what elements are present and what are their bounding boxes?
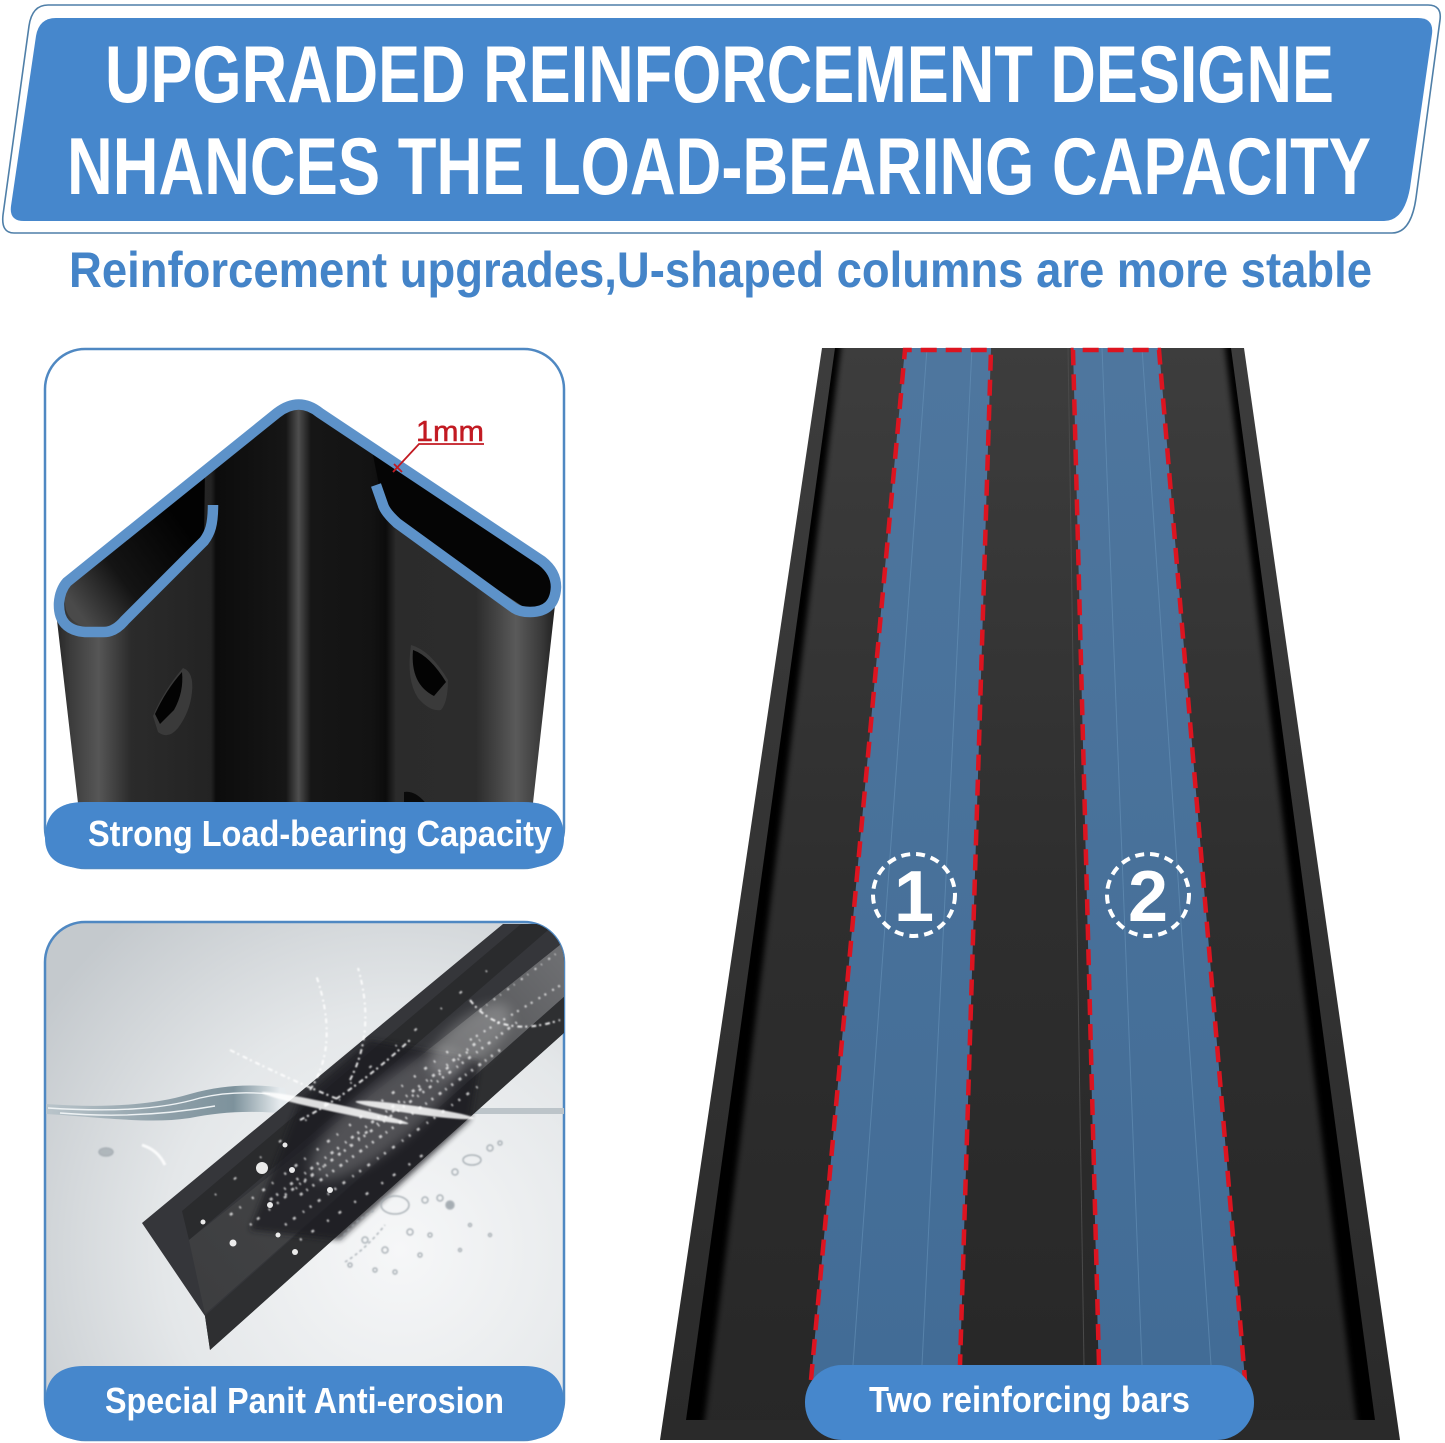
number 1 badge bbox=[873, 854, 955, 937]
rail middle face bbox=[189, 941, 565, 1314]
badge digit: 2 bbox=[1128, 857, 1168, 937]
panel: anti-erosion bbox=[45, 922, 570, 1440]
leader line bbox=[393, 444, 484, 472]
column profile outline bbox=[59, 404, 556, 632]
bar 1 fill bbox=[811, 348, 991, 1380]
dark wet patch bbox=[250, 1040, 480, 1240]
U-shaped column illustration bbox=[55, 404, 557, 812]
panel background bbox=[45, 922, 564, 1440]
bar 2 creases bbox=[1102, 348, 1211, 1365]
caption: special paint anti-erosion bbox=[45, 1366, 564, 1440]
caption pill bbox=[45, 1366, 564, 1440]
hole right opening bbox=[413, 650, 446, 696]
water horizon right bbox=[470, 1108, 570, 1114]
speckled spray bbox=[215, 950, 561, 1240]
panel background bbox=[45, 349, 564, 868]
droplets below surface bbox=[99, 1141, 502, 1274]
panel: load-bearing capacity bbox=[45, 349, 564, 868]
rail in water illustration bbox=[46, 924, 570, 1350]
caption text: Special Panit Anti-erosion bbox=[105, 1380, 504, 1421]
bar 1 red dashed outline bbox=[811, 350, 991, 1380]
bar 1 bbox=[811, 348, 991, 1380]
banner fill bbox=[11, 18, 1432, 221]
rail outer rim bbox=[660, 348, 1400, 1440]
column body bbox=[55, 404, 557, 812]
centre groove bbox=[1068, 348, 1084, 1365]
dimension: 1mm bbox=[393, 416, 484, 472]
bar 2 red dashed outline bbox=[1073, 350, 1245, 1380]
interior shadow right bbox=[1224, 340, 1381, 1425]
hole right bbox=[410, 645, 448, 710]
caption: two reinforcing bars bbox=[805, 1365, 1254, 1440]
caption: strong load-bearing capacity bbox=[45, 802, 564, 868]
hole bottom bbox=[404, 792, 424, 802]
interior shadow left bbox=[680, 340, 842, 1425]
rail channel bbox=[182, 924, 555, 1240]
interior edge shadows bbox=[680, 340, 1381, 1425]
rail base bbox=[142, 924, 565, 1350]
panel: rail with two reinforcing bars bbox=[660, 340, 1400, 1440]
ribbon highlights bbox=[48, 1093, 270, 1115]
bar 2 bbox=[1073, 348, 1245, 1380]
hole left opening bbox=[155, 672, 182, 724]
banner outline bbox=[3, 5, 1440, 233]
splash glow bbox=[230, 968, 560, 1199]
caption text: Strong Load-bearing Capacity bbox=[88, 813, 552, 854]
1mm label: 1mm bbox=[416, 416, 484, 448]
caption pill bbox=[805, 1365, 1254, 1440]
badge circle bbox=[873, 854, 955, 936]
number 2 badge bbox=[1107, 854, 1189, 937]
hole left bbox=[153, 668, 192, 735]
rail interior bbox=[686, 348, 1375, 1420]
badge digit: 1 bbox=[894, 857, 934, 937]
badge circle bbox=[1107, 854, 1189, 936]
caption pill bbox=[45, 802, 564, 868]
caption text: Two reinforcing bars bbox=[869, 1379, 1190, 1420]
droplets on rail bbox=[200, 1142, 333, 1255]
left channel interior bbox=[65, 468, 205, 630]
right channel interior bbox=[373, 455, 551, 607]
rail lower face bbox=[205, 996, 565, 1350]
bar 2 fill bbox=[1073, 348, 1245, 1380]
water ribbon bbox=[46, 1086, 290, 1121]
bar 1 creases bbox=[853, 348, 972, 1365]
banner bbox=[3, 5, 1440, 233]
